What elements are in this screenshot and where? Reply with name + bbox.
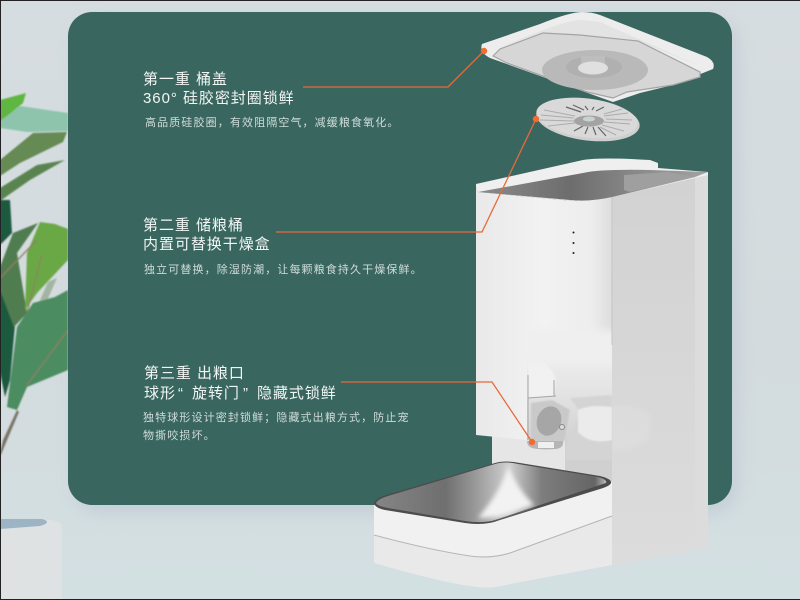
cutaway column <box>571 396 612 408</box>
cutaway background <box>527 358 612 440</box>
callout line 1 <box>303 48 487 87</box>
leaf veins <box>0 240 68 385</box>
lid outer rim <box>481 12 714 102</box>
disc edge <box>534 93 642 147</box>
subheading: ” <box>243 385 249 402</box>
hopper opening <box>478 170 708 201</box>
bowl seam <box>374 516 612 557</box>
text block: first layer <box>143 70 400 129</box>
lid hub cap <box>578 62 608 74</box>
cutaway chute <box>528 370 556 398</box>
lid hub <box>581 56 605 67</box>
lid center inner <box>566 56 622 78</box>
pale top leaf <box>0 106 68 132</box>
bowl steel interior <box>376 462 606 522</box>
disc top <box>534 92 640 144</box>
subheading: 球形 <box>144 385 176 402</box>
pot soil <box>0 519 47 529</box>
dark back leaves <box>0 200 15 397</box>
heading: 第一重 桶盖 <box>143 70 228 88</box>
cutaway cylinder <box>578 406 612 441</box>
feeder side strip <box>695 172 708 550</box>
bowl upper white body <box>374 482 612 557</box>
description continued: 物撕咬损坏。 <box>143 428 216 442</box>
subheading: “ <box>178 385 184 402</box>
pale green back stem leaf <box>38 278 57 305</box>
disc dark slots <box>566 105 606 136</box>
disc hub <box>574 116 604 126</box>
cutaway top fade <box>600 330 612 340</box>
description: 独立可替换，除湿防潮，让每颗粮食持久干燥保鲜。 <box>144 262 423 276</box>
silver outlet <box>527 441 563 449</box>
text block: third layer <box>143 364 410 442</box>
lid upper band <box>500 20 700 66</box>
rotating ball valve <box>536 406 562 436</box>
lid inner tray <box>493 33 700 98</box>
drying box disc <box>534 92 642 147</box>
food bowl <box>374 462 612 588</box>
plant pot <box>0 519 62 600</box>
subheading: 360° 硅胶密封圈锁鲜 <box>143 90 295 107</box>
upper olive leaf <box>0 132 67 176</box>
pot body <box>0 520 62 600</box>
subheading: 内置可替换干燥盒 <box>143 236 271 253</box>
bowl highlight <box>478 466 534 518</box>
large lower leaf <box>7 290 68 410</box>
disc hub center <box>583 116 595 122</box>
cutaway shelf <box>528 375 556 440</box>
feeder right side panel <box>612 172 708 565</box>
stem <box>0 410 19 455</box>
description: 独特球形设计密封锁鲜；隐藏式出粮方式，防止宠 <box>143 410 410 424</box>
indicator dots <box>572 232 574 254</box>
bowl rim <box>374 462 611 524</box>
valve knob <box>560 424 564 430</box>
feeder lower column <box>565 440 612 485</box>
panel edge line <box>611 197 613 345</box>
disc light slots <box>540 109 632 135</box>
outlet highlight <box>538 442 554 448</box>
plant <box>0 93 68 455</box>
callout line 3 <box>341 382 535 445</box>
callout line 2 <box>276 116 539 232</box>
lid center recess <box>542 50 648 90</box>
heading: 第二重 储粮桶 <box>143 216 244 234</box>
subheading: 隐藏式锁鲜 <box>257 385 337 402</box>
subheading: 旋转门 <box>192 385 240 402</box>
bright green leaf <box>25 222 68 310</box>
description: 高品质硅胶圈，有效阻隔空气，减缓粮食氧化。 <box>145 115 400 129</box>
feeder rim <box>476 158 708 201</box>
feeder body <box>476 158 708 565</box>
top bright leaf <box>0 93 26 122</box>
narrow olive leaf <box>0 160 65 201</box>
bowl lower base <box>374 505 612 588</box>
cutaway shaded throat <box>531 400 570 442</box>
feeder neck <box>492 425 565 480</box>
bucket lid <box>481 12 714 102</box>
hopper inner ledge <box>624 172 695 192</box>
feeder front face <box>476 187 612 440</box>
panel: green background <box>68 12 732 505</box>
panel shadow <box>74 18 738 514</box>
olive leaf <box>0 223 38 327</box>
heading: 第三重 出粮口 <box>144 364 245 382</box>
feeder cutaway interior <box>527 330 612 450</box>
text block: second layer <box>143 216 423 276</box>
ghost internals on side panel <box>612 405 650 450</box>
